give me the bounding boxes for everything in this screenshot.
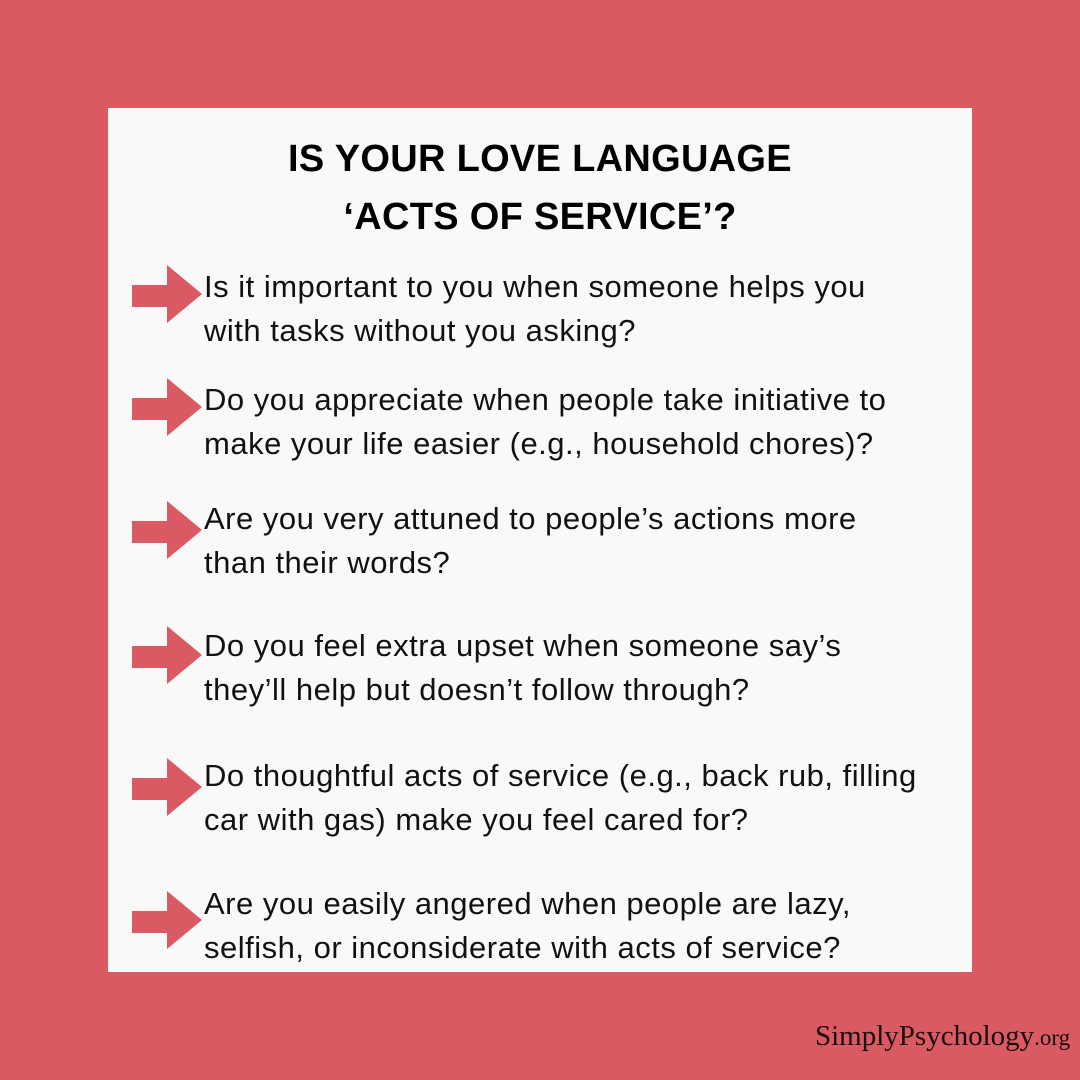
- text: question 1: Is it important to you when someone helps you: [204, 269, 866, 304]
- title: IS YOUR LOVE LANGUAGE: [288, 138, 792, 180]
- item 5: [132, 758, 917, 837]
- title: ‘ACTS OF SERVICE’?: [343, 196, 737, 238]
- text: question 3: Are you very attuned to people’s actions more: [204, 501, 857, 536]
- item 1: [132, 265, 866, 348]
- footer: brand: SimplyPsychology.org: [815, 1020, 1070, 1052]
- panel: white card: [108, 108, 972, 972]
- item 3: [132, 501, 857, 580]
- text: question 5: car with gas) make you feel cared for?: [204, 802, 749, 837]
- text: question 6: Are you easily angered when people are lazy,: [204, 886, 851, 921]
- icon: arrow: [132, 501, 202, 559]
- item 2: [132, 378, 886, 461]
- text: question 3: than their words?: [204, 545, 450, 580]
- item 6: [132, 886, 851, 965]
- text: question 4: Do you feel extra upset when someone say’s: [204, 628, 841, 663]
- text: question 1: with tasks without you asking?: [204, 313, 636, 348]
- text: question 2: Do you appreciate when people take initiative to: [204, 382, 886, 417]
- icon: arrow: [132, 626, 202, 684]
- text: question 5: Do thoughtful acts of service (e.g., back rub, filling: [204, 758, 917, 793]
- text: question 4: [204, 628, 841, 707]
- text: question 3: [204, 501, 857, 580]
- icon: arrow: [132, 265, 202, 323]
- text: question 2: make your life easier (e.g., household chores)?: [204, 426, 874, 461]
- icon: arrow: [132, 378, 202, 436]
- text: question 2: [204, 382, 886, 461]
- text: question 4: they’ll help but doesn’t follow through?: [204, 672, 750, 707]
- text: question 6: [204, 886, 851, 965]
- icon: arrow: [132, 891, 202, 949]
- item 4: [132, 626, 841, 707]
- text: question 1: [204, 269, 866, 348]
- text: question 5: [204, 758, 917, 837]
- title: [288, 138, 792, 238]
- icon: arrow: [132, 758, 202, 816]
- text: question 6: selfish, or inconsiderate with acts of service?: [204, 930, 841, 965]
